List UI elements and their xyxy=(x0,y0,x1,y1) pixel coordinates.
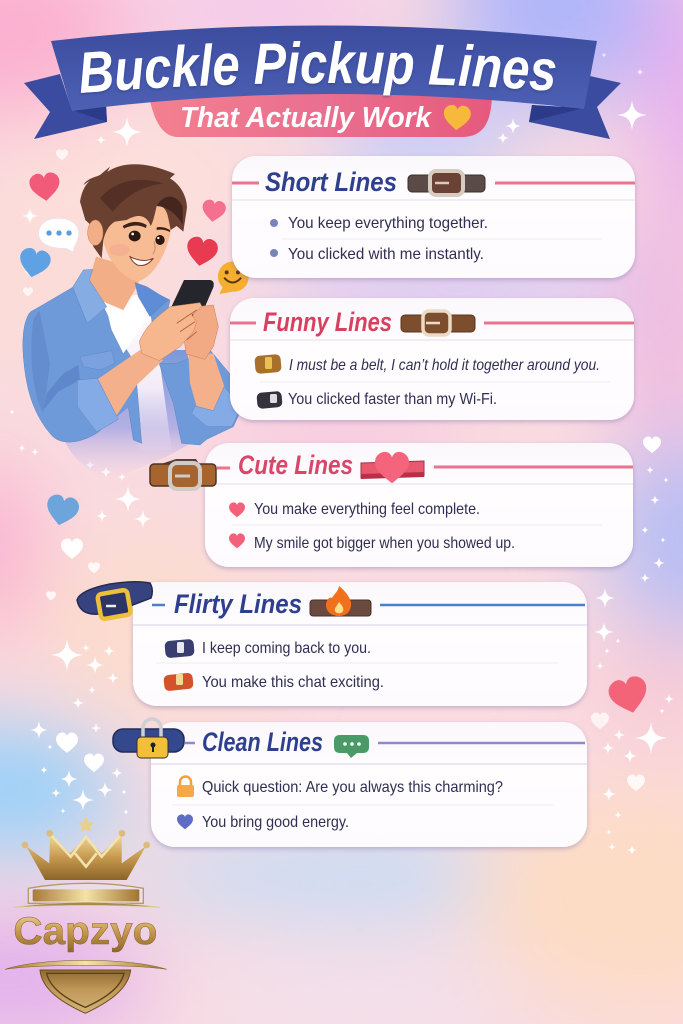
eyes and brows xyxy=(123,222,170,245)
smartphone xyxy=(168,280,214,325)
t-shirt neckline xyxy=(105,298,147,353)
banner right tail xyxy=(529,74,621,139)
decorative sparkles and hearts xyxy=(9,52,674,855)
panel: funny lines xyxy=(230,298,634,420)
heading accent lines xyxy=(232,182,635,184)
icon: dark belt xyxy=(408,171,485,195)
icon: gold mini belt xyxy=(254,354,282,374)
collar right xyxy=(135,283,168,317)
blush xyxy=(109,244,129,256)
panel: flirty lines xyxy=(77,582,587,706)
line text: Quick question: Are you always this charming? xyxy=(202,779,503,796)
icon: brown buckle belt xyxy=(150,459,216,489)
icon: heart bullet xyxy=(229,502,245,517)
back hand xyxy=(184,305,218,359)
ear xyxy=(88,220,103,245)
left rolled sleeve xyxy=(77,378,118,432)
torso fading out xyxy=(63,350,203,480)
head xyxy=(101,200,171,281)
heart: red left of head xyxy=(29,172,61,202)
icon: gold heart xyxy=(443,104,471,131)
icon: red mini belt xyxy=(163,672,194,691)
icon: heart belt xyxy=(361,452,424,483)
right rolled sleeve xyxy=(192,387,242,427)
banner left tail xyxy=(24,74,107,139)
icon: blue heart bullet xyxy=(177,814,193,829)
icon: belt with padlock xyxy=(113,719,184,758)
line text: I keep coming back to you. xyxy=(202,640,371,657)
line text: I must be a belt, I can’t hold it together around you. xyxy=(289,357,600,374)
neck xyxy=(89,257,140,310)
left forearm xyxy=(98,350,163,415)
line text: You make everything feel complete. xyxy=(254,501,480,518)
front hand xyxy=(139,303,202,361)
heart: coral right xyxy=(606,674,652,717)
bullet xyxy=(270,249,278,257)
title banner xyxy=(24,26,621,139)
wing bar xyxy=(5,960,167,969)
icon: navy mini belt xyxy=(164,639,195,658)
heading accent lines xyxy=(152,604,585,606)
subtitle text: That Actually Work xyxy=(180,102,433,134)
chest pocket xyxy=(80,351,115,370)
logo: Capzyo crown and shield xyxy=(5,816,167,1013)
line text: You keep everything together. xyxy=(288,215,488,232)
shield xyxy=(40,970,131,1013)
chat bubble xyxy=(39,218,79,252)
heading accent lines xyxy=(230,322,634,324)
heading: Clean Lines xyxy=(202,727,323,757)
collar left xyxy=(73,269,107,323)
heart: pink right of head xyxy=(201,199,227,223)
panel: clean lines xyxy=(113,719,587,847)
bullet xyxy=(270,219,278,227)
shirt right panel xyxy=(135,283,243,445)
line text: You bring good energy. xyxy=(202,814,349,831)
line text: You clicked with me instantly. xyxy=(288,246,484,263)
icon: brown belt xyxy=(401,311,475,335)
heading: Cute Lines xyxy=(238,450,353,480)
smile xyxy=(130,257,153,265)
crown band xyxy=(13,883,160,907)
panel: short lines xyxy=(232,156,635,278)
title text: Buckle Pickup Lines xyxy=(80,41,556,98)
star xyxy=(78,816,94,832)
smiley chat icon xyxy=(218,261,249,294)
icon: green chat bubble xyxy=(334,735,369,758)
crown xyxy=(22,830,150,880)
line text: My smile got bigger when you showed up. xyxy=(254,535,515,552)
white t-shirt xyxy=(100,293,172,450)
heart: blue xyxy=(16,246,52,280)
icon: orange padlock xyxy=(177,776,194,797)
heading: Funny Lines xyxy=(263,307,392,337)
heading: Short Lines xyxy=(265,167,397,197)
heart: red xyxy=(184,235,219,269)
hair xyxy=(80,164,187,258)
illustration: young man with phone xyxy=(16,164,249,480)
heading: Flirty Lines xyxy=(174,589,302,619)
shirt left panel xyxy=(23,271,142,443)
line text: You make this chat exciting. xyxy=(202,674,384,691)
subtitle pill xyxy=(148,90,492,137)
icon: heart bullet xyxy=(229,533,245,548)
heading accent lines xyxy=(217,467,633,468)
icon: navy belt with gold buckle xyxy=(77,582,152,619)
heading accent lines xyxy=(185,742,585,744)
banner main xyxy=(51,26,597,111)
logo wordmark: Capzyo xyxy=(13,909,157,953)
nose xyxy=(153,242,155,254)
panel: cute lines xyxy=(150,443,633,567)
line text: You clicked faster than my Wi-Fi. xyxy=(288,391,497,408)
icon: flame belt xyxy=(310,586,371,616)
heart: blue left xyxy=(43,493,81,528)
right forearm xyxy=(188,353,226,411)
icon: black mini belt xyxy=(256,391,283,409)
